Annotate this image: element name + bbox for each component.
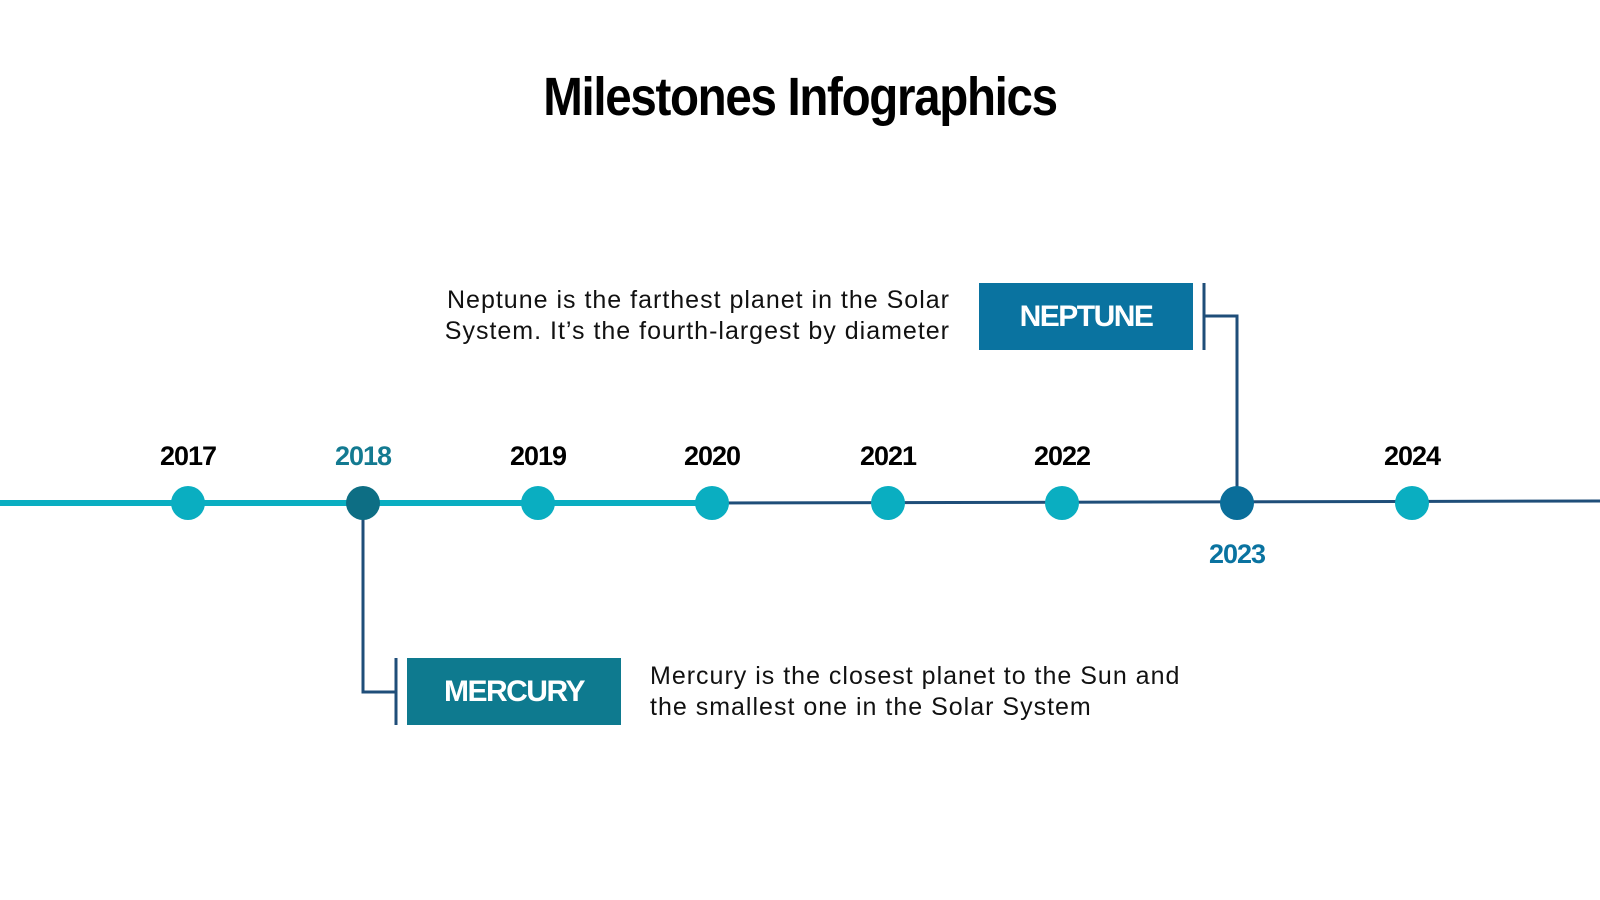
neptune text xyxy=(445,286,950,345)
navy line xyxy=(712,501,1600,503)
year labels: 2019 xyxy=(510,441,566,471)
year labels: 2023 xyxy=(1209,539,1265,569)
neptune box xyxy=(979,283,1193,350)
connector mercury xyxy=(363,503,396,692)
year labels: 2021 xyxy=(860,441,916,471)
neptune text: Neptune is the farthest planet in the Solar xyxy=(447,286,950,314)
dots xyxy=(171,486,1429,520)
cyan progress line xyxy=(0,500,712,506)
year labels: 2018 xyxy=(335,441,391,471)
mercury box: MERCURY xyxy=(444,675,584,708)
neptune text: System. It’s the fourth-largest by diameter xyxy=(445,317,950,345)
mercury box xyxy=(407,658,621,725)
connector neptune xyxy=(1204,316,1237,503)
mercury text xyxy=(650,662,1180,721)
mercury text: the smallest one in the Solar System xyxy=(650,693,1092,721)
neptune box: NEPTUNE xyxy=(1020,300,1152,333)
title: Milestones Infographics xyxy=(543,67,1057,127)
year labels: 2020 xyxy=(684,441,740,471)
mercury text: Mercury is the closest planet to the Sun and xyxy=(650,662,1180,690)
year labels: 2022 xyxy=(1034,441,1090,471)
year labels: 2017 xyxy=(160,441,216,471)
year labels: 2024 xyxy=(1384,441,1440,471)
